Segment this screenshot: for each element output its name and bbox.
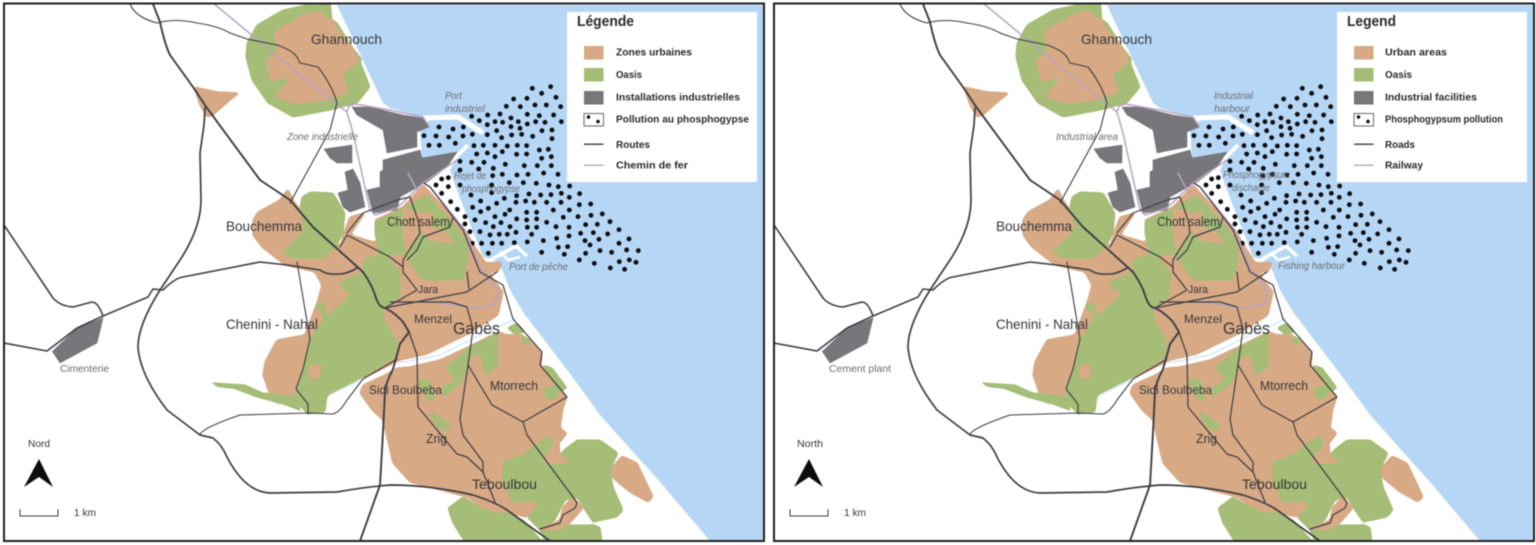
map: sea and coast [218, 5, 764, 541]
legend: industrial: Installations industrielles [616, 92, 740, 104]
map: oases [983, 0, 1393, 545]
map: railway [983, 3, 1268, 308]
site labels: Rejet de [454, 170, 486, 182]
legend: roads [1354, 139, 1415, 151]
place names: Teboulbou [472, 476, 537, 492]
place names: Ghannouch [1081, 31, 1152, 47]
legend: railway: Chemin de fer [616, 160, 688, 172]
site labels [829, 90, 1345, 375]
site labels: Industrial area [1056, 131, 1118, 143]
place names: Ghannouch [311, 31, 382, 47]
legend title: Legend [1347, 14, 1396, 30]
legend: oasis [1354, 68, 1412, 82]
map: railway [213, 3, 498, 308]
legend: railway: Railway [1385, 160, 1423, 172]
place names: Mtorrech [1260, 379, 1308, 393]
map: phosphogypsum pollution dots [1194, 87, 1408, 269]
place names: Jara [1188, 284, 1209, 296]
north arrow: Nord [28, 439, 50, 450]
place names: Menzel [1184, 312, 1222, 326]
legend: roads: Routes [616, 139, 650, 151]
place names [226, 31, 538, 492]
site labels: phosphogypse [461, 183, 520, 195]
scale bar: 1 km [74, 508, 96, 519]
place names: Sidi Boulbeba [1139, 383, 1212, 397]
legend: phosphogypsum: Phosphogypsum pollution [1385, 114, 1503, 126]
legend: oasis: Oasis [616, 69, 642, 81]
legend: phosphogypsum [1354, 114, 1503, 126]
place names: Chenini - Nahal [226, 316, 318, 332]
scale bar [20, 508, 96, 519]
legend: roads [584, 139, 650, 151]
legend: urban: Urban areas [1385, 46, 1447, 58]
map: industrial facilities [52, 107, 457, 363]
map: urban areas [194, 10, 653, 517]
place names: Zrig [1196, 432, 1217, 446]
map: urban areas [964, 10, 1423, 517]
place names: Zrig [426, 432, 447, 446]
site labels: Phosphogypsum [1223, 169, 1290, 181]
place names: Chott salem [387, 215, 450, 229]
place names: Chott salem [1157, 215, 1220, 229]
legend: oasis: Oasis [1385, 69, 1412, 81]
north arrow: North [797, 439, 823, 450]
legend title: Légende [577, 14, 634, 30]
site labels: Zone industrielle [286, 131, 358, 143]
north arrow [24, 439, 53, 487]
north arrow [794, 439, 823, 487]
legend: railway [584, 160, 688, 172]
site labels: harbour [1214, 103, 1250, 115]
map: sea and coast [988, 5, 1534, 541]
map: oases [213, 0, 623, 545]
legend: phosphogypsum: Pollution au phosphogypse [616, 114, 749, 126]
site labels: discharge [1232, 182, 1270, 194]
place names: Menzel [414, 312, 452, 326]
legend [567, 12, 757, 182]
place names: Teboulbou [1242, 476, 1307, 492]
map: roads [4, 4, 577, 541]
legend: urban: Zones urbaines [616, 46, 692, 58]
place names: Jara [418, 284, 439, 296]
site labels: Fishing harbour [1278, 260, 1345, 272]
legend: railway [1354, 160, 1423, 172]
site labels: Cimenterie [60, 363, 109, 375]
panel: French map [4, 0, 764, 545]
place names: Mtorrech [490, 379, 538, 393]
legend: urban [1354, 46, 1447, 60]
map: phosphogypsum pollution dots [424, 87, 638, 269]
place names: Gabès [453, 319, 500, 338]
map: industrial facilities [822, 107, 1227, 363]
legend: roads: Roads [1385, 139, 1415, 151]
place names: Sidi Boulbeba [369, 383, 442, 397]
site labels: industriel [445, 103, 486, 115]
map frame [774, 4, 1534, 541]
map: roads [774, 4, 1347, 541]
legend [1337, 12, 1527, 182]
scale bar: 1 km [844, 508, 866, 519]
map frame [4, 4, 764, 541]
scale bar [790, 508, 866, 519]
legend: industrial [584, 91, 740, 104]
place names: Chenini - Nahal [996, 316, 1088, 332]
site labels: Port [445, 90, 463, 102]
panel: English map [774, 0, 1534, 545]
place names: Bouchemma [226, 218, 302, 234]
place names [996, 31, 1308, 492]
site labels: Industrial [1214, 90, 1254, 102]
place names: Gabès [1223, 319, 1270, 338]
site labels [60, 90, 568, 375]
site labels: Port de pêche [509, 261, 568, 273]
place names: Bouchemma [996, 218, 1072, 234]
legend: urban [584, 46, 692, 60]
legend: industrial [1354, 91, 1477, 104]
legend: industrial: Industrial facilities [1385, 92, 1477, 104]
site labels: Cement plant [829, 363, 891, 375]
legend: oasis [584, 68, 642, 82]
